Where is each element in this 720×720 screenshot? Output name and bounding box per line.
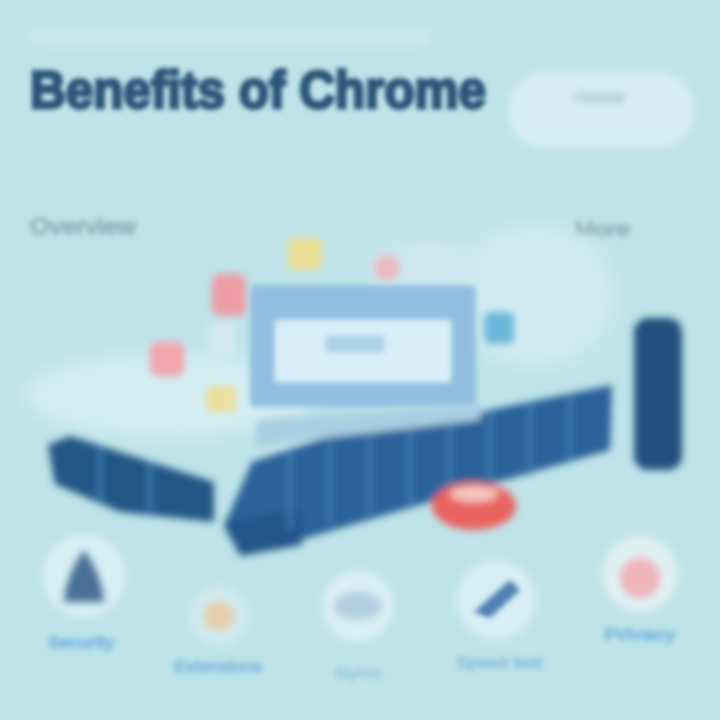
feature 5 circle — [602, 536, 678, 612]
left label: Overview — [30, 214, 136, 239]
cloud backdrop — [25, 223, 615, 437]
feature 2 — [174, 586, 262, 676]
icon: pink dot — [374, 255, 400, 281]
laptop — [250, 285, 476, 407]
feature 2 icon — [204, 601, 234, 631]
feature 3 label: Sync — [334, 665, 383, 682]
feature 4 circle — [456, 560, 536, 640]
icon: blue tile — [484, 312, 514, 344]
right label: More — [574, 219, 630, 241]
icon: pale yellow tile — [206, 386, 236, 412]
feature 3 icon — [334, 592, 382, 620]
icon: pale tile — [208, 322, 236, 356]
feature 2 circle — [189, 586, 249, 646]
laptop screen — [275, 320, 451, 382]
floating icons — [150, 238, 514, 412]
icon: coral tile — [150, 342, 184, 376]
feature 1 circle — [42, 534, 126, 618]
feature 5 icon — [620, 558, 660, 598]
feature 1 — [42, 534, 126, 652]
feature 4 icon — [474, 580, 520, 618]
feature 4 — [456, 560, 543, 672]
feature 5 — [602, 536, 678, 644]
red button — [432, 482, 516, 530]
feature 4 label: Speed test — [456, 655, 543, 672]
left dark block — [48, 436, 214, 522]
feature 3 circle — [322, 570, 394, 642]
platform stripes — [100, 395, 570, 530]
icon: red tile — [212, 274, 246, 316]
platform front block — [224, 510, 302, 556]
platform top strip — [256, 404, 480, 446]
badge: Chrome — [575, 89, 625, 105]
laptop screen frame — [250, 285, 476, 407]
right tower — [634, 318, 682, 470]
feature 2 label: Extensions — [174, 657, 262, 676]
icon: yellow note — [288, 238, 322, 270]
base platform — [48, 318, 682, 556]
top subtitle bar — [30, 27, 430, 47]
screen content — [325, 335, 385, 353]
feature 3 — [322, 570, 394, 682]
title: Benefits of Chrome — [30, 61, 486, 120]
main platform — [224, 385, 612, 555]
feature 1 label: Security — [48, 633, 115, 652]
feature 1 icon — [64, 550, 104, 602]
feature 5 label: Privacy — [604, 625, 677, 644]
badge — [508, 72, 694, 148]
